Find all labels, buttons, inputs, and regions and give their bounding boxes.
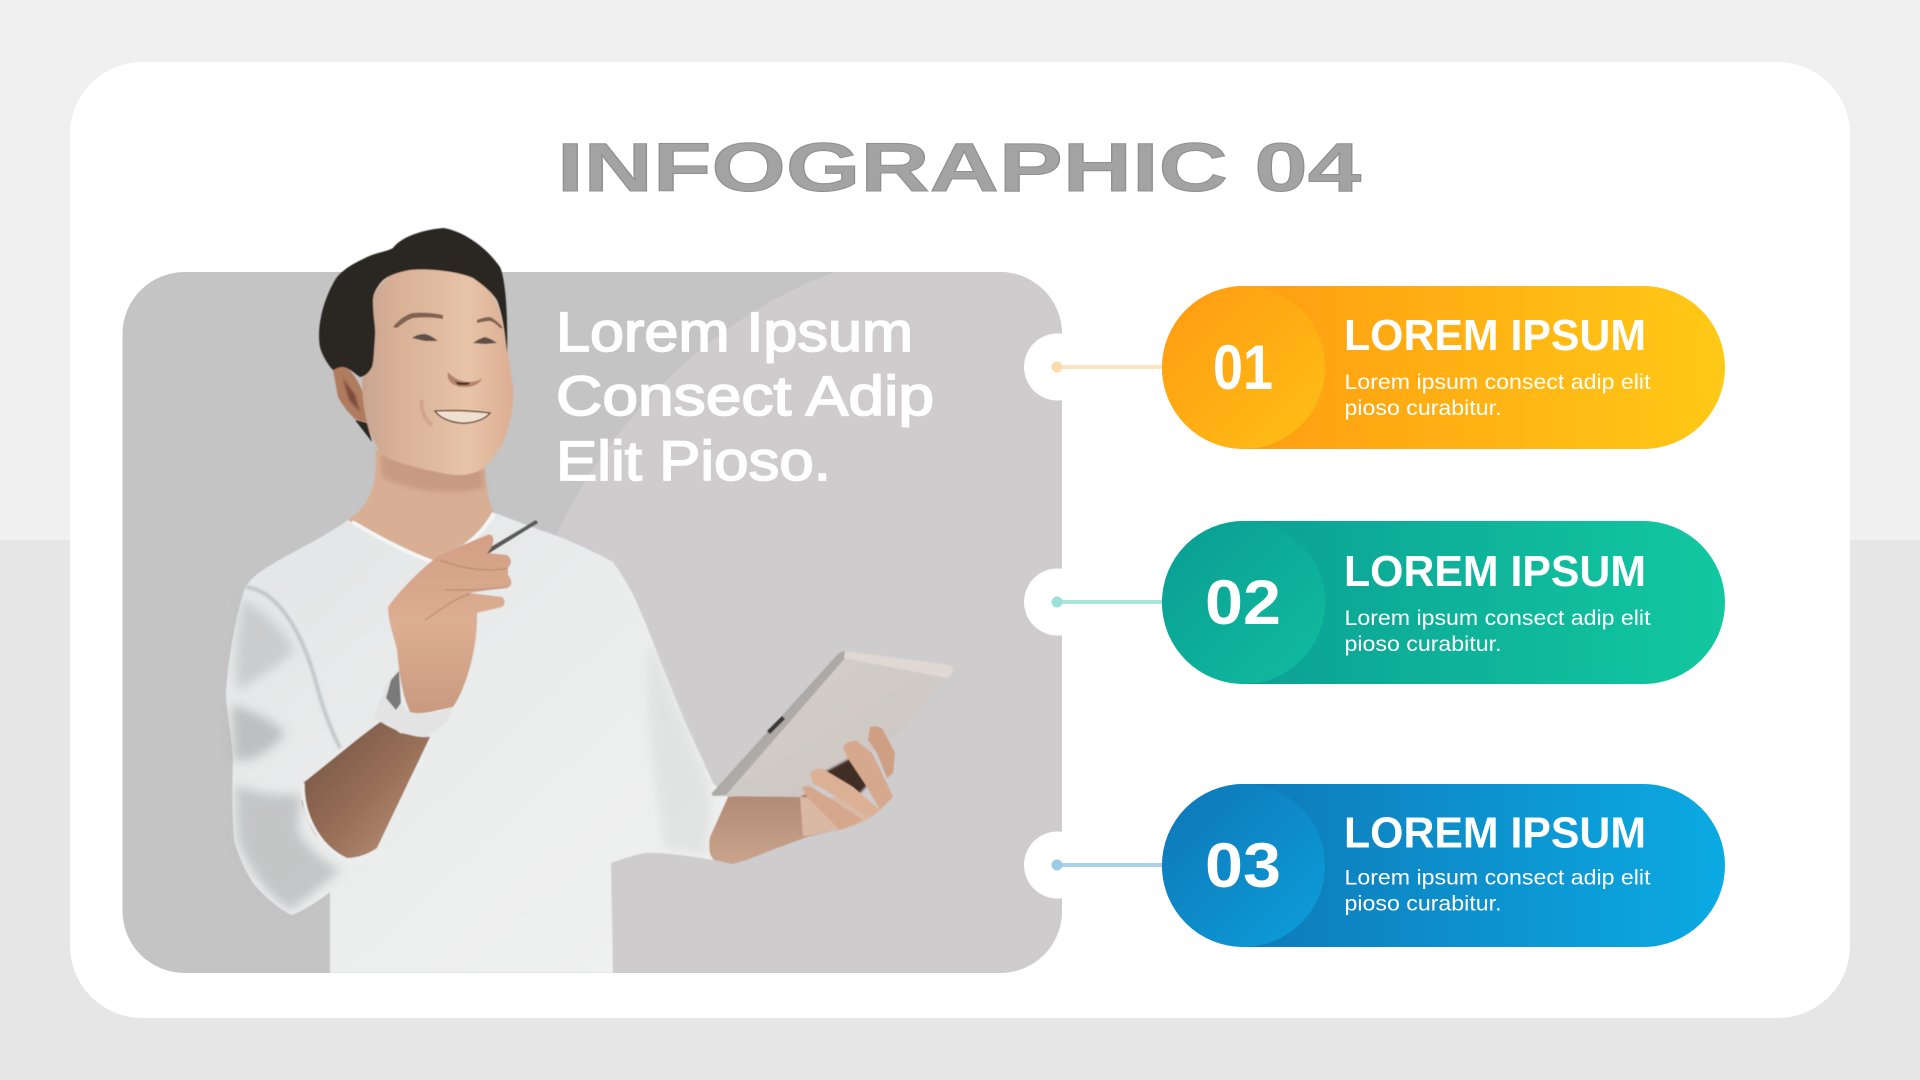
connector line 3	[1057, 863, 1163, 867]
callout 3	[1052, 784, 1725, 947]
callout 2	[1052, 521, 1725, 684]
number circle 1	[1162, 286, 1325, 449]
number circle 3	[1162, 784, 1325, 947]
pill 2	[1162, 521, 1725, 684]
finger 4	[868, 726, 895, 778]
connector line 2	[1057, 600, 1163, 604]
right forearm	[708, 794, 830, 864]
connector dot 1	[1052, 362, 1062, 372]
hair behind ear	[355, 420, 372, 442]
callout heading 1: LOREM IPSUM	[1344, 311, 1646, 360]
shirt fold shading	[232, 600, 711, 910]
finger 2	[810, 769, 880, 817]
neck shadow under chin	[380, 455, 484, 492]
person with tablet	[226, 228, 953, 973]
callout 1	[1052, 286, 1725, 449]
pen	[484, 520, 538, 554]
head	[319, 228, 513, 475]
mouth	[435, 411, 490, 423]
tablet body	[719, 686, 938, 798]
connector notch 1	[1024, 334, 1091, 400]
number 03: 03	[1205, 831, 1281, 901]
panel heading text: Elit Pioso.	[556, 429, 831, 492]
pill 1	[1162, 286, 1725, 449]
number 01: 01	[1213, 333, 1273, 403]
palm	[800, 797, 880, 836]
connector line 1	[1057, 365, 1163, 369]
hair	[319, 228, 507, 377]
hand	[388, 535, 511, 713]
callout body 2: pioso curabitur.	[1344, 632, 1502, 656]
callout body 2: Lorem ipsum consect adip elit	[1344, 606, 1651, 630]
finger 3	[843, 741, 893, 810]
sleeve seam	[246, 587, 340, 748]
panel heading text	[556, 300, 934, 492]
connector dot 3	[1052, 860, 1062, 870]
right arm and hand	[709, 651, 953, 864]
left forearm	[302, 720, 430, 858]
callout body 3: pioso curabitur.	[1344, 892, 1502, 916]
left eye	[412, 334, 438, 341]
number 02: 02	[1205, 568, 1281, 638]
right eye	[473, 337, 497, 344]
sleeve cuff lip	[302, 782, 346, 858]
connector dot 2	[1052, 596, 1062, 608]
tablet port	[767, 716, 785, 734]
collar rim	[352, 514, 494, 562]
panel: grey photo panel	[122, 272, 1062, 973]
callout heading 2: LOREM IPSUM	[1344, 547, 1646, 596]
smile crease	[422, 400, 432, 425]
callout body 3: Lorem ipsum consect adip elit	[1344, 866, 1651, 890]
finger 1	[802, 786, 863, 830]
neck	[348, 450, 497, 562]
connector notch 3	[1024, 832, 1091, 898]
nostril	[455, 381, 470, 385]
watch dark face	[386, 671, 401, 710]
panel heading text: Consect Adip	[556, 364, 934, 427]
face	[362, 262, 513, 475]
title: INFOGRAPHIC 04	[557, 129, 1361, 206]
tablet left edge	[712, 651, 848, 796]
inner ear	[343, 378, 360, 412]
watch band	[380, 702, 451, 738]
hand with pen	[388, 520, 538, 713]
left eyebrow	[393, 313, 443, 328]
right eyebrow	[477, 317, 503, 328]
shirt torso and sleeves	[226, 512, 728, 973]
finger creases	[425, 560, 508, 620]
pill 3	[1162, 784, 1725, 947]
connector notch 2	[1024, 568, 1091, 636]
callout body 1: pioso curabitur.	[1344, 396, 1502, 420]
callout heading 3: LOREM IPSUM	[1344, 808, 1646, 858]
panel heading text: Lorem Ipsum	[556, 300, 913, 363]
callout body 1: Lorem ipsum consect adip elit	[1344, 370, 1651, 394]
shadow behind fingers	[825, 758, 867, 794]
tablet top edge	[844, 651, 953, 678]
number circle 2	[1162, 521, 1325, 684]
ear	[333, 366, 367, 422]
nose shade	[448, 372, 482, 387]
